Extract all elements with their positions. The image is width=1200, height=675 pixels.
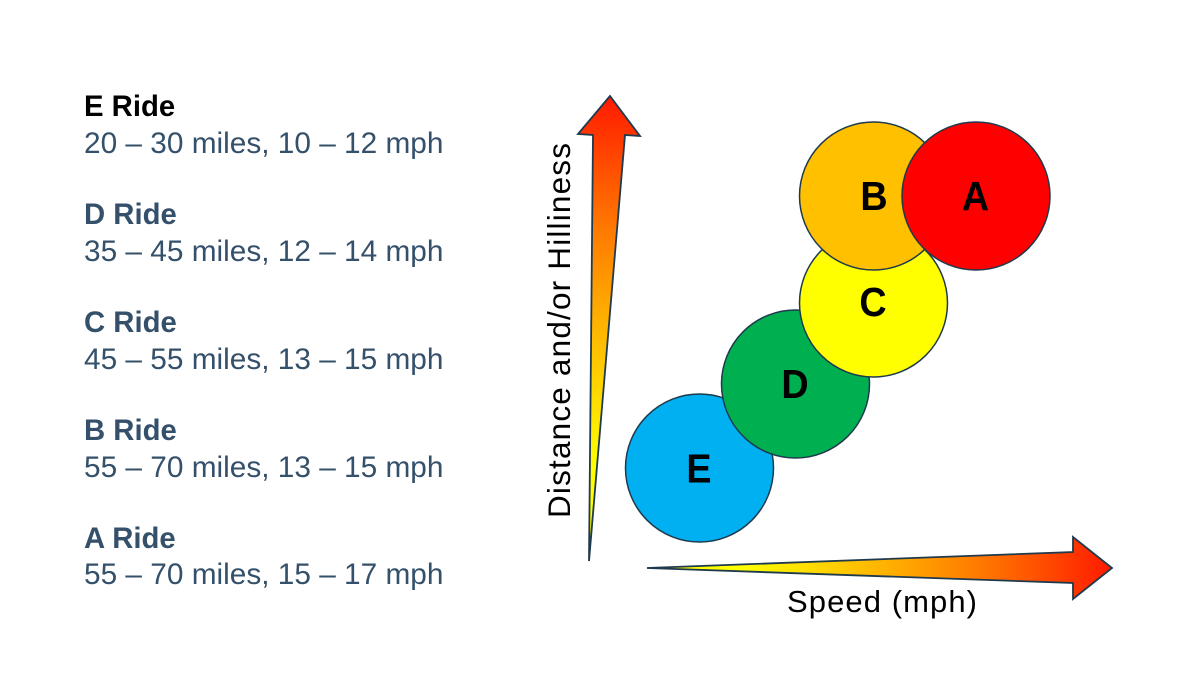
circle: D bbox=[722, 310, 870, 458]
circle: D: D bbox=[781, 362, 809, 407]
circle: E: E bbox=[686, 446, 712, 492]
circle: C: C bbox=[859, 280, 887, 325]
B ride heading: B Ride bbox=[84, 414, 177, 447]
ride list bbox=[84, 90, 443, 591]
A ride heading: A Ride bbox=[84, 522, 176, 555]
circle: A: A bbox=[962, 174, 989, 219]
E ride details: 20 – 30 miles, 10 – 12 mph bbox=[84, 127, 443, 160]
circle: B bbox=[800, 122, 948, 270]
circle: C bbox=[800, 229, 948, 377]
circle: B: B bbox=[860, 174, 888, 219]
E ride heading: E Ride bbox=[84, 90, 175, 123]
D ride heading: D Ride bbox=[84, 198, 177, 231]
C ride heading: C Ride bbox=[84, 306, 177, 339]
B ride details: 55 – 70 miles, 13 – 15 mph bbox=[84, 451, 443, 484]
arrow: vertical distance axis bbox=[578, 96, 640, 561]
D ride details: 35 – 45 miles, 12 – 14 mph bbox=[84, 235, 443, 268]
arrow: horizontal speed axis bbox=[647, 537, 1112, 599]
horizontal axis label: Speed (mph) bbox=[787, 584, 977, 619]
circle: A bbox=[902, 122, 1050, 270]
A ride details: 55 – 70 miles, 15 – 17 mph bbox=[84, 558, 443, 591]
C ride details: 45 – 55 miles, 13 – 15 mph bbox=[84, 343, 443, 376]
vertical axis label: Distance and/or Hilliness bbox=[541, 143, 577, 518]
circle: E bbox=[626, 394, 774, 542]
